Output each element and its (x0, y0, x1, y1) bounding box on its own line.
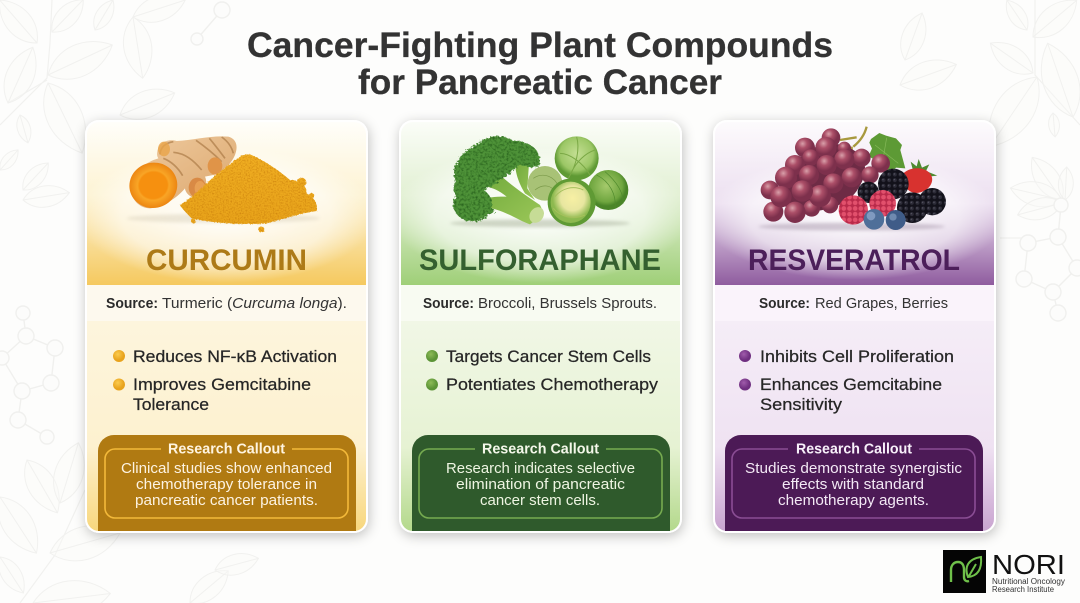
bullet list: curcumin (113, 347, 337, 414)
icon: red grapes and berries (758, 127, 946, 231)
callout: resveratrol research: chemotherapy agents. (778, 493, 929, 509)
logo: NORI: Research Institute (992, 585, 1055, 594)
source: curcumin: Source: (106, 296, 158, 312)
callout: resveratrol research (725, 435, 983, 531)
source: curcumin: Turmeric ( Curcuma longa ). (162, 296, 347, 312)
heading: curcumin: CURCUMIN (146, 244, 307, 277)
title (247, 25, 833, 102)
callout: resveratrol research: effects with standard (782, 477, 924, 493)
title: for Pancreatic Cancer (358, 62, 722, 102)
panel: resveratrol (704, 120, 1004, 533)
heading: sulforaphane: SULFORAPHANE (419, 244, 661, 277)
logo: NORI: NORI (992, 549, 1065, 580)
bullet list: sulforaphane: Targets Cancer Stem Cells (446, 347, 651, 366)
callout: curcumin research: chemotherapy tolerance in (136, 477, 317, 493)
logo: NORI (943, 549, 1065, 594)
source: sulforaphane: Source: (423, 296, 474, 312)
source: resveratrol: Source: (759, 296, 810, 312)
callout: sulforaphane research: elimination of pancreatic (456, 477, 625, 493)
panel: curcumin (76, 120, 376, 533)
callout: curcumin research: Research Callout (168, 442, 285, 458)
bullet list: sulforaphane: Potentiates Chemotherapy (446, 375, 659, 394)
bullet list: resveratrol: Enhances Gemcitabine (760, 375, 942, 394)
bullet list: sulforaphane (426, 347, 659, 394)
title: Cancer-Fighting Plant Compounds (247, 25, 833, 65)
source: sulforaphane: Broccoli, Brussels Sprouts. (478, 296, 657, 312)
bullet list: resveratrol (739, 347, 954, 414)
panel: sulforaphane (390, 120, 690, 533)
callout: sulforaphane research: Research indicates selective (446, 461, 635, 477)
bullet list: curcumin: Tolerance (133, 395, 209, 414)
icon: turmeric root and powder (125, 136, 320, 232)
source: resveratrol: Red Grapes, Berries (815, 296, 948, 312)
heading: resveratrol: RESVERATROL (748, 244, 960, 277)
callout: curcumin research: Clinical studies show enhanced (121, 461, 332, 477)
bullet list: resveratrol: Sensitivity (760, 395, 843, 414)
source: resveratrol (759, 296, 948, 312)
callout: sulforaphane research: Research Callout (482, 442, 599, 458)
callout: resveratrol research: Research Callout (796, 442, 912, 458)
bullet list: resveratrol: Inhibits Cell Proliferation (760, 347, 954, 366)
logo: NORI: Nutritional Oncology (992, 577, 1065, 586)
icon: broccoli and brussels sprouts (450, 136, 630, 227)
callout: resveratrol research: Studies demonstrate synergistic (745, 461, 962, 477)
bullet list: curcumin: Reduces NF-κB Activation (133, 347, 337, 366)
callout: curcumin research (98, 435, 356, 531)
callout: sulforaphane research: cancer stem cells. (480, 493, 600, 509)
callout: sulforaphane research (412, 435, 670, 531)
callout: curcumin research: pancreatic cancer patients. (135, 493, 318, 509)
bullet list: curcumin: Improves Gemcitabine (133, 375, 311, 394)
